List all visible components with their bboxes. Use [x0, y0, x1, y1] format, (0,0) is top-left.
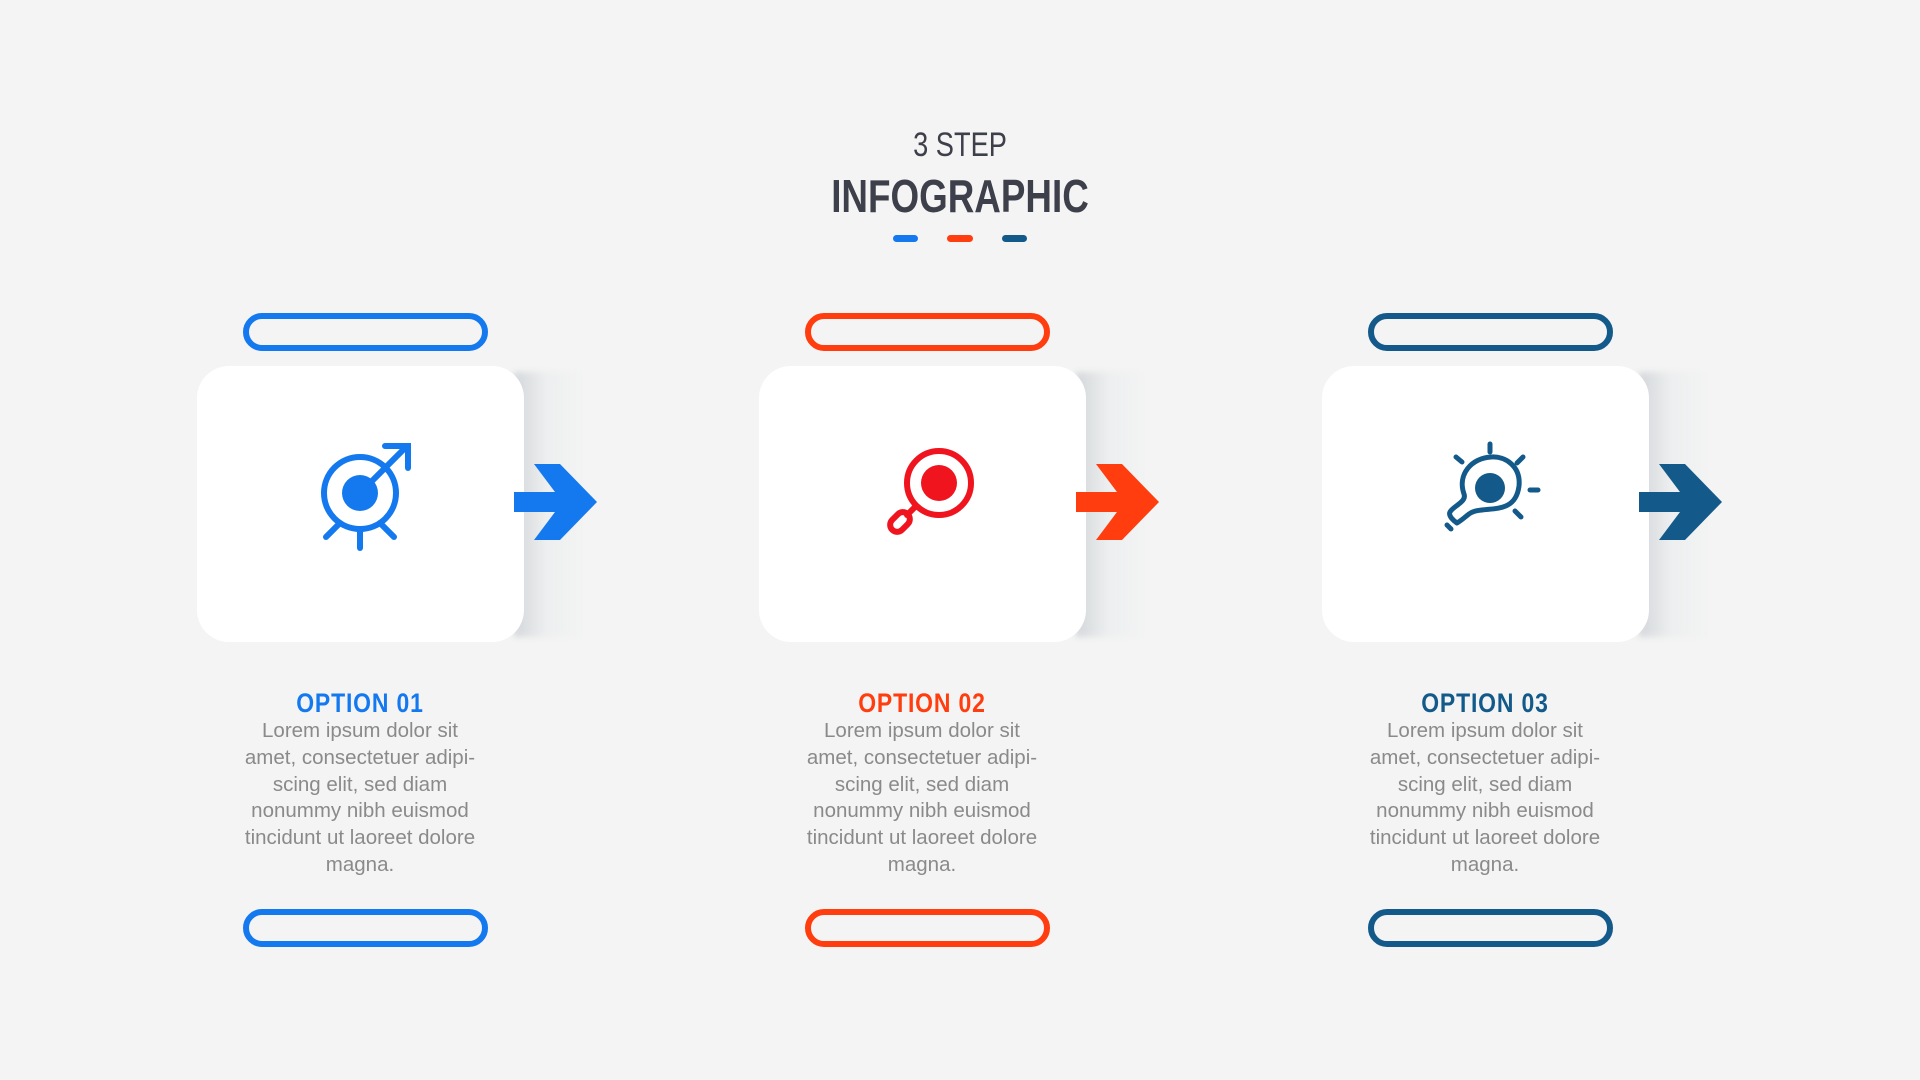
text: tincidunt ut laoreet dolore	[1370, 826, 1600, 849]
icon: light bulb	[1444, 442, 1540, 532]
top pill	[1368, 313, 1613, 351]
card	[197, 366, 524, 642]
text: nonummy nibh euismod	[813, 799, 1031, 822]
card	[759, 366, 1086, 642]
text: tincidunt ut laoreet dolore	[807, 826, 1037, 849]
arrow	[1639, 464, 1722, 540]
text	[1370, 719, 1600, 876]
arrow	[514, 464, 597, 540]
text: magna.	[888, 853, 956, 876]
text: Lorem ipsum dolor sit	[824, 719, 1020, 742]
panel: option 02	[759, 313, 1159, 947]
top pill	[805, 313, 1050, 351]
bottom pill	[805, 909, 1050, 947]
text: magna.	[1451, 853, 1519, 876]
text: amet, consectetuer adipi-	[807, 746, 1037, 769]
title	[831, 126, 1089, 222]
title: INFOGRAPHIC	[831, 170, 1089, 222]
icon: target	[321, 443, 411, 551]
bottom pill	[1368, 909, 1613, 947]
text	[245, 719, 475, 876]
text: scing elit, sed diam	[1398, 773, 1572, 796]
text: nonummy nibh euismod	[251, 799, 469, 822]
text: amet, consectetuer adipi-	[1370, 746, 1600, 769]
icon: magnifier	[887, 448, 974, 535]
card	[1322, 366, 1649, 642]
title: 3 STEP	[913, 126, 1007, 164]
heading: OPTION 02	[858, 688, 986, 718]
title dashes	[893, 235, 1027, 242]
top pill	[243, 313, 488, 351]
heading: OPTION 01	[296, 688, 424, 718]
text: Lorem ipsum dolor sit	[1387, 719, 1583, 742]
text: scing elit, sed diam	[273, 773, 447, 796]
arrow	[1076, 464, 1159, 540]
text: tincidunt ut laoreet dolore	[245, 826, 475, 849]
panel: option 03	[1322, 313, 1722, 947]
text: scing elit, sed diam	[835, 773, 1009, 796]
text: Lorem ipsum dolor sit	[262, 719, 458, 742]
text	[807, 719, 1037, 876]
panel: option 01	[197, 313, 597, 947]
heading: OPTION 03	[1421, 688, 1549, 718]
text: magna.	[326, 853, 394, 876]
text: amet, consectetuer adipi-	[245, 746, 475, 769]
bottom pill	[243, 909, 488, 947]
text: nonummy nibh euismod	[1376, 799, 1594, 822]
